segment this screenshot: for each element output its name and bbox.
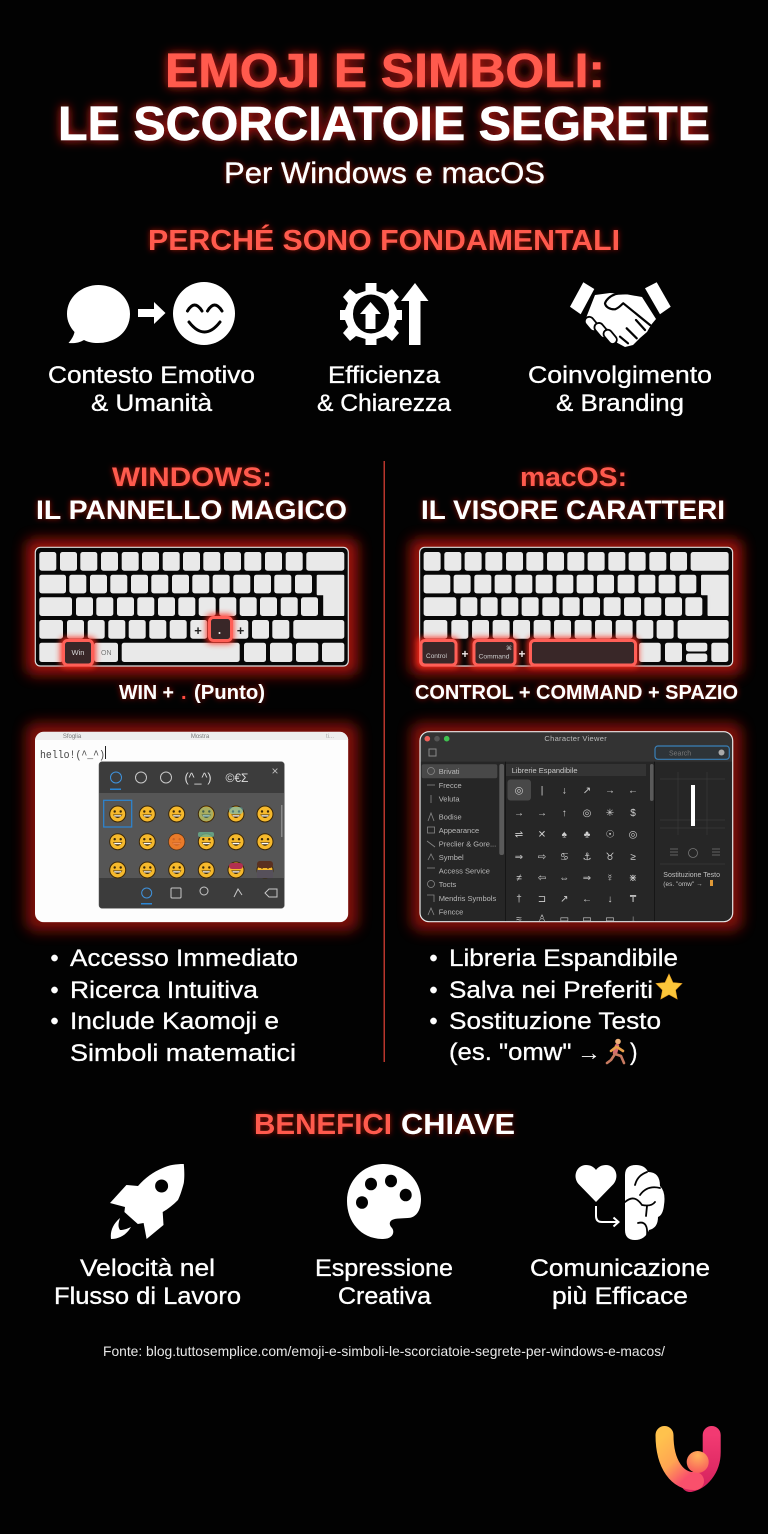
symbol grid: ≈ <box>516 914 522 925</box>
sidebar list: Preclier & Gore... <box>439 840 496 848</box>
label: espressione: Creativa <box>338 1283 432 1310</box>
symbol grid: ◎ <box>515 786 523 796</box>
label: espressione <box>315 1255 453 1310</box>
sidebar list: Fencce <box>439 908 463 916</box>
shortcut label: windows <box>119 682 265 704</box>
character preview <box>660 772 725 888</box>
symbol grid: → <box>605 786 615 796</box>
icon: handshake <box>570 282 671 347</box>
bullet list: windows: Simboli matematici <box>70 1040 296 1067</box>
character preview: Sostituzione Testo <box>663 872 720 879</box>
icon: star <box>656 974 682 999</box>
label: coinvolgimento: & Branding <box>556 390 684 417</box>
label: velocità: Velocità nel <box>80 1255 215 1282</box>
heading: windows <box>36 462 347 525</box>
bullet list: macos: Sostituzione Testo <box>449 1008 661 1035</box>
label: velocità <box>54 1255 241 1310</box>
symbol grid <box>514 786 638 925</box>
symbol grid: ⇔ <box>559 873 569 884</box>
screenshot: macos character viewer: Librerie Espandibile <box>512 766 578 775</box>
keyboard: macos: + <box>461 647 469 661</box>
symbol grid: ♋ <box>560 852 569 863</box>
heading: windows: WINDOWS: <box>112 462 272 492</box>
bullet list: macos <box>430 945 678 1066</box>
label: coinvolgimento <box>528 362 712 417</box>
label: contesto emotivo <box>48 362 255 417</box>
symbol grid: ▭ <box>560 914 569 925</box>
sidebar list <box>439 767 496 916</box>
symbol grid: ♙ <box>538 914 546 925</box>
symbol grid: ⇌ <box>515 830 523 840</box>
keyboard: windows: + <box>237 623 245 638</box>
bullet list: macos: (es. "omw" <box>449 1039 572 1066</box>
symbol grid: ◎ <box>629 830 637 840</box>
icon: speech bubble to smiley <box>67 282 235 345</box>
key highlight: command: ⌘ <box>506 645 512 652</box>
symbol grid: ⊐ <box>538 894 546 905</box>
keyboard: macos <box>410 539 742 675</box>
icon: rocket <box>110 1164 184 1239</box>
heading: perché sono fondamentali: PERCHÉ SONO FONDAMENTALI <box>148 223 620 257</box>
symbol grid: ♣ <box>584 830 591 840</box>
key highlight: control <box>417 637 459 668</box>
label: efficienza: Efficienza <box>328 362 441 389</box>
screenshot: windows emoji panel: ti... <box>326 734 334 740</box>
label: espressione: Espressione <box>315 1255 453 1282</box>
key highlight: command: Command <box>478 654 510 660</box>
emoji picker: (^_^) <box>184 771 212 785</box>
sidebar list: Appearance <box>439 826 479 835</box>
shortcut label: windows: WIN + <box>119 682 174 704</box>
symbol grid: ◎ <box>583 808 591 819</box>
title: EMOJI E SIMBOLI: <box>165 45 605 98</box>
symbol grid: ⚓ <box>583 852 592 863</box>
keyboard: windows: ON <box>101 650 112 657</box>
symbol grid: ← <box>582 894 592 905</box>
emoji picker: ©€Σ <box>226 771 248 785</box>
heading: benefici chiave: CHIAVE <box>401 1109 515 1141</box>
screenshot: windows emoji panel: hello!(^_^) <box>40 750 105 762</box>
sidebar list: Tocts <box>439 880 456 889</box>
sidebar list: Access Service <box>439 866 490 876</box>
screenshot: macos character viewer: Search <box>669 750 691 758</box>
title: LE SCORCIATOIE SEGRETE <box>58 98 710 151</box>
icon: palette <box>347 1164 421 1239</box>
label: comunicazione: Comunicazione <box>530 1255 710 1282</box>
source: Fonte: blog.tuttosemplice.com/emoji-e-simboli-le-scorciatoie-segrete-per-windows-e-macos/ <box>103 1343 665 1359</box>
subtitle: Per Windows e macOS <box>224 157 545 190</box>
sidebar list: Symbel <box>439 853 464 862</box>
emoji picker <box>99 762 284 908</box>
icon: runner <box>607 1039 624 1063</box>
heading: macos: IL VISORE CARATTERI <box>421 495 725 525</box>
symbol grid: ✳ <box>606 808 614 819</box>
icon: heart and brain <box>576 1165 664 1240</box>
symbol grid: ♠ <box>562 830 568 840</box>
heading: macos: macOS: <box>520 462 627 492</box>
keyboard: windows <box>26 539 358 675</box>
shortcut label: windows: (Punto) <box>194 682 265 704</box>
title <box>58 45 710 151</box>
symbol grid: ↓ <box>608 894 612 905</box>
keyboard: windows: + <box>194 623 202 638</box>
label: efficienza <box>317 362 452 417</box>
key highlight: command <box>470 637 518 668</box>
key highlight: space <box>527 637 639 668</box>
bullet list: windows: Include Kaomoji e <box>70 1008 279 1035</box>
symbol grid: ☉ <box>606 830 615 840</box>
symbol grid: ⇒ <box>515 852 523 863</box>
bullet list: windows <box>51 945 298 1067</box>
sidebar list: Frecce <box>439 781 462 790</box>
symbol grid: ⇦ <box>538 873 546 884</box>
heading: windows: IL PANNELLO MAGICO <box>36 495 347 525</box>
character preview: (es. "omw" → <box>663 881 703 888</box>
bullet list: windows: Accesso Immediato <box>70 945 298 972</box>
shortcut label: windows: . <box>181 682 187 704</box>
symbol grid: ← <box>628 786 638 796</box>
screenshot: windows emoji panel <box>26 723 358 931</box>
sidebar list: Veluta <box>439 794 460 804</box>
symbol grid: ↑ <box>562 808 567 819</box>
symbol grid: ✕ <box>538 830 546 840</box>
bullet list: macos: ) <box>630 1039 638 1066</box>
heading: benefici chiave: BENEFICI <box>254 1109 392 1141</box>
screenshot: macos character viewer: Character Viewer <box>544 734 607 743</box>
symbol grid: ⇨ <box>538 852 546 863</box>
symbol grid: → <box>514 808 524 819</box>
symbol grid: ▭ <box>582 914 592 925</box>
screenshot: windows emoji panel: Mostra <box>191 734 210 740</box>
screenshot: windows emoji panel: Sfoglia <box>63 734 82 740</box>
bullet list: macos: Libreria Espandibile <box>449 945 678 972</box>
key highlight: period <box>206 614 234 644</box>
bullet list: windows: Ricerca Intuitiva <box>70 977 259 1004</box>
label: contesto emotivo: Contesto Emotivo <box>48 362 255 389</box>
logo <box>664 1435 712 1483</box>
label: velocità: Flusso di Lavoro <box>54 1283 241 1310</box>
symbol grid: ⋇ <box>629 873 637 884</box>
sidebar list: Bodise <box>439 812 462 822</box>
heading: macos <box>421 462 725 525</box>
symbol grid: ↓ <box>630 914 636 925</box>
symbol grid: ▭ <box>605 914 615 925</box>
icon: gear with arrows <box>340 283 428 345</box>
bullet list: macos: → <box>577 1040 601 1065</box>
symbol grid: ≠ <box>516 873 522 884</box>
key highlight: win <box>60 637 96 668</box>
symbol grid: ↗ <box>560 894 568 905</box>
symbol grid: † <box>516 894 522 905</box>
symbol grid: ≥ <box>630 852 636 863</box>
emoji picker: × <box>271 764 279 778</box>
sidebar list: Brivati <box>439 767 460 776</box>
symbol grid: ↓ <box>562 786 567 796</box>
key highlight: control: Control <box>426 653 448 660</box>
symbol grid: ↗ <box>583 786 591 796</box>
symbol grid: → <box>537 808 547 819</box>
screenshot: macos character viewer <box>411 723 742 931</box>
sidebar list: Mendris Symbols <box>439 894 496 903</box>
label: comunicazione: più Efficace <box>552 1283 688 1310</box>
label: comunicazione <box>530 1255 710 1310</box>
heading: benefici chiave <box>254 1109 515 1141</box>
symbol grid: $ <box>630 808 636 819</box>
label: contesto emotivo: & Umanità <box>91 390 213 417</box>
label: coinvolgimento: Coinvolgimento <box>528 362 712 389</box>
shortcut label: macos: CONTROL + COMMAND + SPAZIO <box>415 682 738 704</box>
symbol grid: | <box>541 786 543 796</box>
symbol grid: ☿ <box>606 873 614 884</box>
symbol grid: ♉ <box>606 852 615 863</box>
label: efficienza: & Chiarezza <box>317 390 452 417</box>
symbol grid: ₸ <box>630 894 637 905</box>
bullet list: macos: Salva nei Preferiti <box>449 977 653 1004</box>
key highlight: win: Win <box>72 648 84 657</box>
symbol grid: ⇒ <box>583 873 591 884</box>
keyboard: macos: + <box>518 647 526 661</box>
